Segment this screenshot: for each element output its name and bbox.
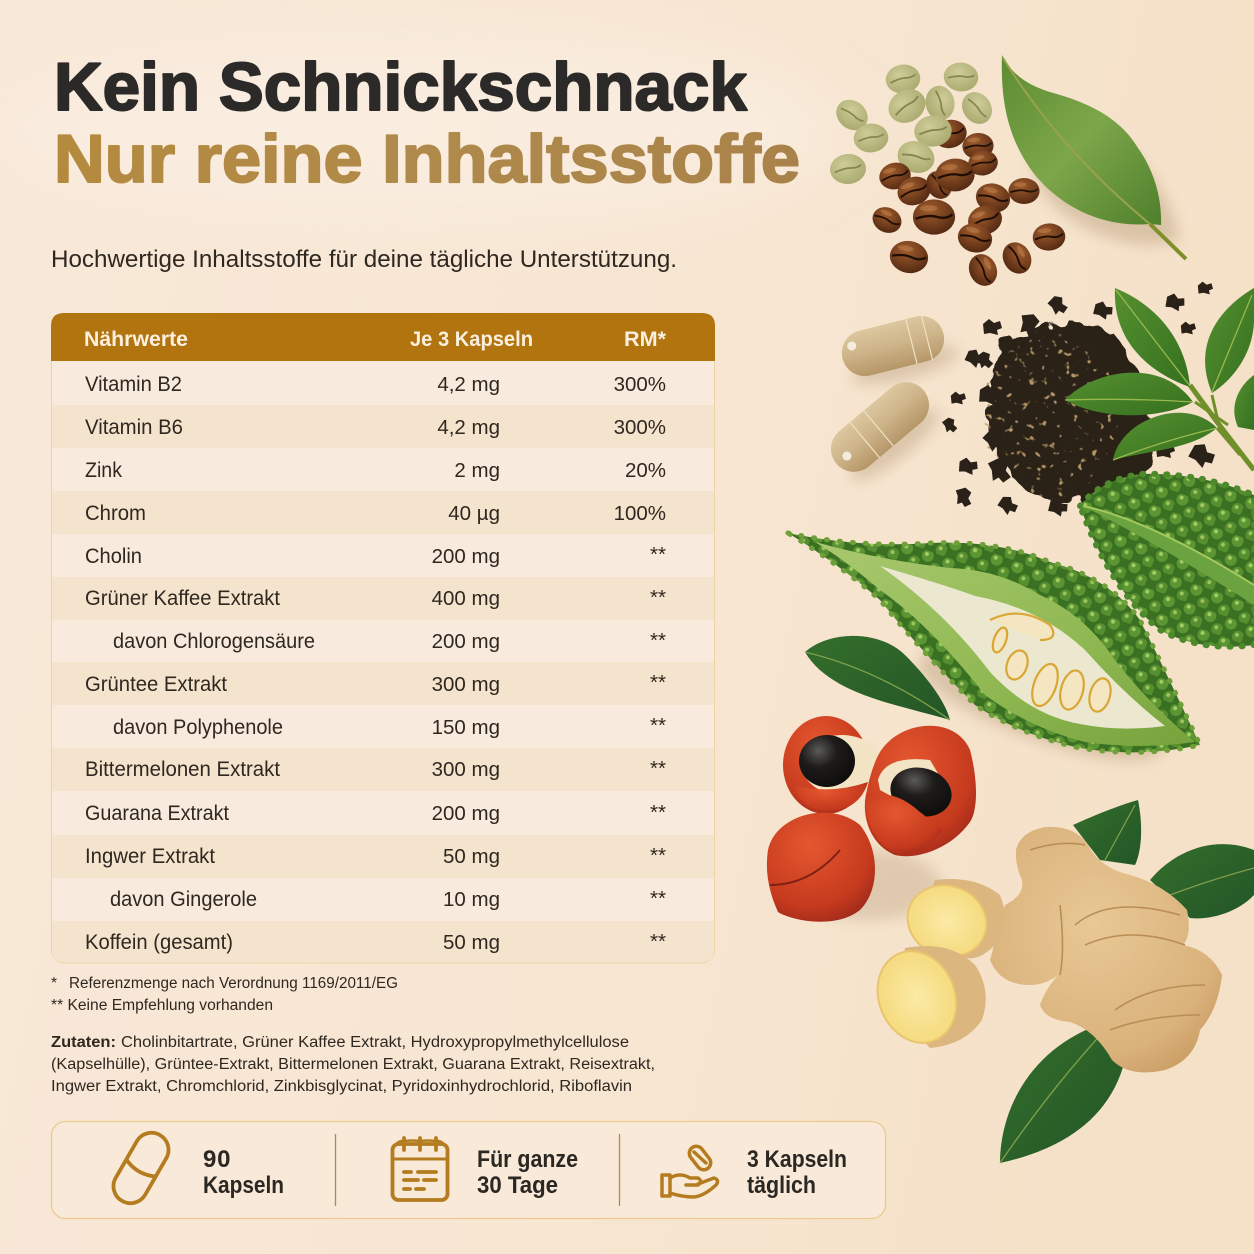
ginger slice 2 xyxy=(864,939,986,1055)
ingredients text: Ingwer Extrakt, Chromchlorid, Zinkbisglycinat, Pyridoxinhydrochlorid, Riboflavin xyxy=(51,1078,632,1095)
capsule bottom xyxy=(822,373,938,481)
row: Ingwer Extrakt: Ingwer Extrakt xyxy=(85,845,215,868)
illustration: coffee beans xyxy=(829,61,1066,291)
footnotes xyxy=(51,975,398,1014)
ingredients text: Zutaten: xyxy=(51,1034,116,1051)
subtitle: Hochwertige Inhaltsstoffe für deine tägliche Unterstützung. xyxy=(51,246,677,273)
row: Zink: 20% xyxy=(625,459,666,482)
footnotes: Referenzmenge nach Verordnung 1169/2011/EG xyxy=(69,975,398,992)
ginger slice 1 xyxy=(897,874,1005,968)
icon: hand with capsule xyxy=(662,1143,718,1197)
label: 3 Kapseln täglich: 3 Kapseln xyxy=(747,1146,847,1173)
row: Cholin: Cholin xyxy=(85,545,142,568)
row: Vitamin B2: 4,2 mg xyxy=(437,373,500,396)
row: davon Gingerole: davon Gingerole xyxy=(110,888,257,911)
illustration: large coffee leaf xyxy=(1002,55,1186,259)
label: 3 Kapseln täglich xyxy=(747,1146,847,1199)
row: Grüner Kaffee Extrakt xyxy=(52,577,714,620)
illustration: whole bitter melon xyxy=(1080,474,1254,647)
illustration: small leaf xyxy=(805,636,950,720)
leaf A xyxy=(1115,288,1190,387)
label: 3 Kapseln täglich: täglich xyxy=(747,1172,816,1199)
row: Vitamin B6: Vitamin B6 xyxy=(85,416,183,439)
row: Koffein (gesamt): ** xyxy=(650,930,666,953)
illustration: cut bitter melon xyxy=(788,533,1200,782)
row: Guarana Extrakt: ** xyxy=(650,801,666,824)
leaf E xyxy=(1234,375,1254,430)
guarana top right xyxy=(865,726,976,856)
icon: calendar xyxy=(392,1138,448,1200)
row: Grüntee Extrakt: ** xyxy=(650,671,666,694)
row: davon Polyphenole: davon Polyphenole xyxy=(113,716,283,739)
row: davon Chlorogensäure: ** xyxy=(650,629,666,652)
row: Zink xyxy=(85,459,666,482)
row: davon Chlorogensäure: 200 mg xyxy=(432,630,500,653)
row: davon Gingerole xyxy=(110,887,666,911)
label: Für ganze 30 Tage xyxy=(477,1146,578,1199)
row: davon Gingerole: ** xyxy=(650,887,666,910)
info bar xyxy=(52,1122,886,1218)
guarana top left xyxy=(783,716,882,814)
row: davon Polyphenole: ** xyxy=(650,714,666,737)
illustration: capsules xyxy=(822,311,962,490)
title xyxy=(54,49,800,197)
row: Chrom: Chrom xyxy=(85,502,146,525)
leaf C xyxy=(1065,373,1193,415)
illustration: guarana fruits xyxy=(767,716,976,922)
illustration: loose black tea xyxy=(941,282,1219,518)
label: Für ganze 30 Tage: 30 Tage xyxy=(477,1172,558,1199)
row: Guarana Extrakt: Guarana Extrakt xyxy=(85,802,229,825)
row: Vitamin B6: 4,2 mg xyxy=(437,416,500,439)
row: Chrom: 40 µg xyxy=(448,502,500,525)
melon seeds xyxy=(990,614,1114,714)
label: 90 Kapseln: Kapseln xyxy=(203,1172,284,1199)
row: Vitamin B6 xyxy=(52,405,714,448)
row: davon Gingerole: 10 mg xyxy=(443,888,500,911)
capsule top xyxy=(837,311,949,381)
illustration: ginger leaves xyxy=(1000,800,1254,1163)
row: Guarana Extrakt: 200 mg xyxy=(432,802,500,825)
row: Vitamin B2: 300% xyxy=(614,373,666,396)
title line 1: Kein Schnickschnack xyxy=(54,49,747,125)
illustration: ginger root xyxy=(864,827,1222,1072)
row: Cholin: 200 mg xyxy=(432,545,500,568)
footnotes: * xyxy=(51,975,57,992)
row: Ingwer Extrakt: ** xyxy=(650,844,666,867)
table header: Je 3 Kapseln xyxy=(410,328,533,351)
leaf B xyxy=(1205,288,1254,393)
ingredients text: Cholinbitartrate, Grüner Kaffee Extrakt, Hydroxypropylmethylcellulose xyxy=(121,1034,629,1051)
leaf D xyxy=(1113,413,1217,460)
row: Ingwer Extrakt xyxy=(52,835,714,878)
ingredients text xyxy=(51,1034,655,1095)
row: davon Polyphenole: 150 mg xyxy=(432,716,500,739)
table header xyxy=(51,313,715,361)
row: Vitamin B6: 300% xyxy=(614,416,666,439)
icon: capsule xyxy=(107,1127,175,1209)
label: Für ganze 30 Tage: Für ganze xyxy=(477,1146,578,1173)
row: Vitamin B2: Vitamin B2 xyxy=(85,373,182,396)
row: Zink: 2 mg xyxy=(454,459,500,482)
row: Vitamin B2 xyxy=(85,373,666,396)
row: davon Chlorogensäure: davon Chlorogensäure xyxy=(113,630,315,653)
row: Chrom: 100% xyxy=(614,502,666,525)
row: Chrom xyxy=(52,491,714,534)
row: Grüner Kaffee Extrakt: 400 mg xyxy=(432,587,500,610)
row: Koffein (gesamt) xyxy=(52,921,714,962)
row: Grüner Kaffee Extrakt: ** xyxy=(650,586,666,609)
illustration: tea branch xyxy=(1065,288,1254,470)
row: Grüntee Extrakt: Grüntee Extrakt xyxy=(85,673,227,696)
row: Bittermelonen Extrakt: ** xyxy=(650,757,666,780)
table header: Nährwerte xyxy=(84,328,188,351)
nutrition table xyxy=(51,313,715,963)
title line 2: Nur reine Inhaltsstoffe xyxy=(54,121,800,197)
label: 90 Kapseln xyxy=(203,1146,284,1199)
row: Koffein (gesamt): 50 mg xyxy=(443,931,500,954)
row: Bittermelonen Extrakt xyxy=(52,748,714,791)
row: Grüner Kaffee Extrakt: Grüner Kaffee Extrakt xyxy=(85,587,280,610)
ingredients text: (Kapselhülle), Grüntee-Extrakt, Bittermelonen Extrakt, Guarana Extrakt, Reisextrakt, xyxy=(51,1056,655,1073)
row: Cholin xyxy=(85,543,666,568)
row: Cholin: ** xyxy=(650,543,666,566)
row: Bittermelonen Extrakt: Bittermelonen Extrakt xyxy=(85,758,280,781)
row: davon Chlorogensäure xyxy=(113,629,666,653)
row: davon Polyphenole xyxy=(113,714,666,739)
footnotes: ** Keine Empfehlung vorhanden xyxy=(51,997,273,1014)
row: Grüntee Extrakt xyxy=(52,662,714,705)
row: Grüntee Extrakt: 300 mg xyxy=(432,673,500,696)
label: 90 Kapseln: 90 xyxy=(203,1146,231,1173)
row: Koffein (gesamt): Koffein (gesamt) xyxy=(85,931,233,954)
row: Ingwer Extrakt: 50 mg xyxy=(443,845,500,868)
guarana bottom xyxy=(767,813,875,922)
row: Bittermelonen Extrakt: 300 mg xyxy=(432,758,500,781)
row: Zink: Zink xyxy=(85,459,122,482)
table body panel xyxy=(52,325,714,963)
row: Guarana Extrakt xyxy=(85,801,666,825)
table header: RM* xyxy=(624,328,667,351)
